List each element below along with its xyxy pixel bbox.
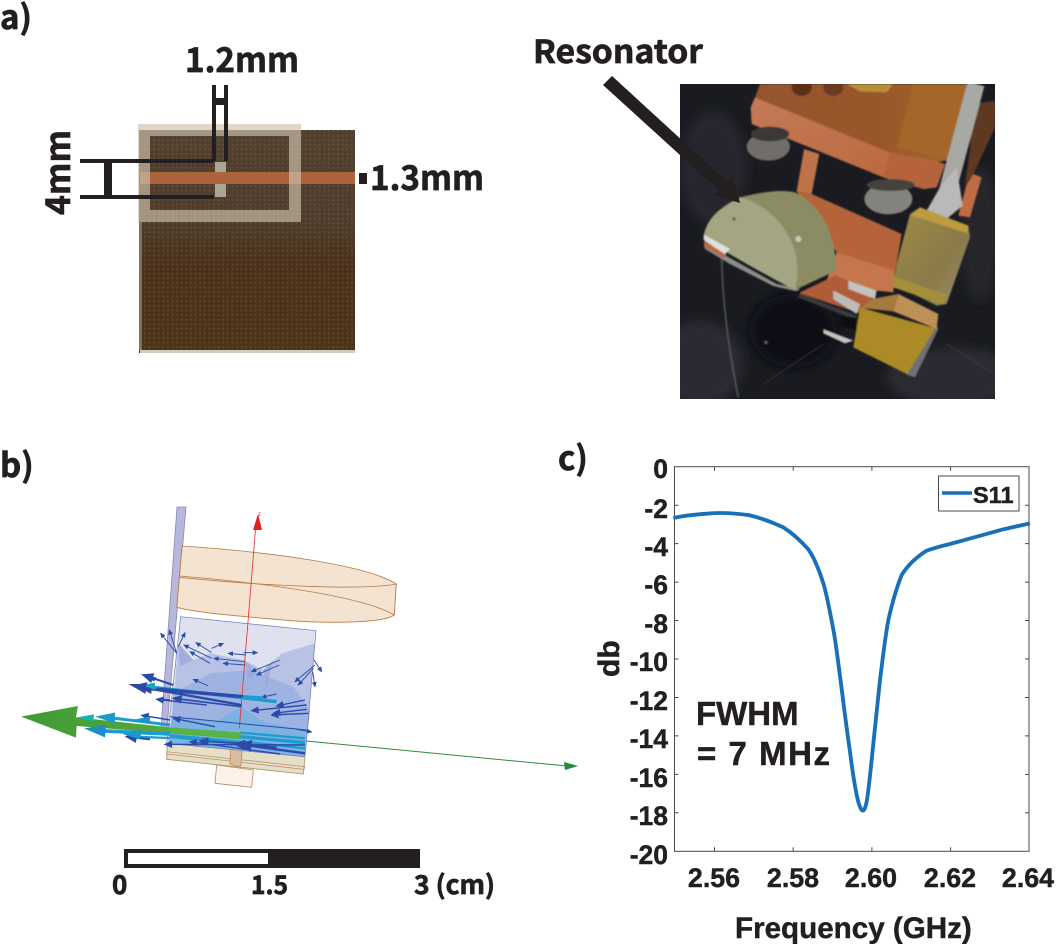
right copper arm xyxy=(958,174,982,217)
S11 curve xyxy=(673,513,1030,811)
x-axis tick labels xyxy=(688,863,1054,893)
ticks xyxy=(674,467,1029,851)
scale label 0: 0 xyxy=(112,865,127,902)
brass block xyxy=(853,307,938,376)
panel label: c): c) xyxy=(558,432,588,480)
silver solder under resonator xyxy=(705,244,800,291)
brass shoulder above block xyxy=(862,294,898,311)
chart: S11 reflection vs frequency xyxy=(593,454,1054,944)
y-axis tick labels: -2 xyxy=(644,494,668,524)
axis: z xyxy=(239,523,256,728)
copper microstrip line xyxy=(140,172,355,184)
arrow: pointing to resonator xyxy=(603,76,740,203)
dimension label: 1.2mm: 1.2mm xyxy=(185,33,299,82)
copper plate band xyxy=(751,97,945,189)
photo: fabricated resonator on copper mount xyxy=(680,84,995,399)
x-axis tick labels: 2.58 xyxy=(767,863,819,893)
brass collar xyxy=(893,294,938,329)
cavity field volume xyxy=(167,617,316,757)
feed stub xyxy=(215,765,253,787)
y-axis tick labels: -12 xyxy=(630,686,668,716)
silver coax rod xyxy=(947,84,976,194)
dimension label: 4mm: 4mm xyxy=(31,130,80,215)
strong cyan vectors xyxy=(105,687,305,748)
axis: x xyxy=(306,741,578,770)
annotation: FWHM = 7 MHz: = 7 MHz xyxy=(697,735,830,772)
base substrate xyxy=(167,743,305,774)
scale label 3 (cm): 3 (cm) xyxy=(414,865,495,902)
plot frame xyxy=(674,467,1029,851)
panel: circuit board with resonator slot dimensions xyxy=(31,33,484,353)
copper bracket xyxy=(797,149,819,194)
y-axis tick labels: -16 xyxy=(630,763,668,793)
y-axis title: db xyxy=(593,640,626,677)
y-axis tick labels: -6 xyxy=(644,570,668,600)
y-axis tick labels: -8 xyxy=(644,609,668,639)
y-axis tick labels: -20 xyxy=(630,840,668,870)
x-axis tick labels: 2.64 xyxy=(1002,863,1054,893)
legend: S11 xyxy=(973,482,1014,508)
cyan arrowheads xyxy=(77,674,157,739)
resonator body xyxy=(740,190,836,290)
medium blue vectors xyxy=(127,675,308,754)
dominant green field arrow xyxy=(21,706,242,739)
legend xyxy=(938,476,1019,511)
resonator outline overlay xyxy=(138,124,301,222)
x-axis tick labels: 2.60 xyxy=(845,863,897,893)
y-axis tick labels: -14 xyxy=(630,724,668,754)
panel label: b): b) xyxy=(0,439,34,487)
scale label 1.5: 1.5 xyxy=(251,865,288,902)
x-axis tick labels: 2.62 xyxy=(924,863,976,893)
resonator half disc xyxy=(177,546,396,622)
y-axis tick labels: -18 xyxy=(630,801,668,831)
annotation: FWHM = 7 MHz: FWHM xyxy=(696,695,799,732)
y-axis tick labels: -10 xyxy=(630,647,668,677)
annotation: FWHM = 7 MHz xyxy=(696,695,830,772)
screws xyxy=(747,133,790,161)
label: Resonator: Resonator xyxy=(533,27,703,73)
slot vias xyxy=(215,162,226,197)
solder tabs xyxy=(848,281,877,299)
y-axis tick labels xyxy=(630,454,668,870)
dimension lines xyxy=(80,85,367,199)
axis: z arrowhead xyxy=(253,512,262,530)
feed probe rod xyxy=(161,507,186,728)
axis: z arrowhead: z xyxy=(258,512,261,518)
circuit board xyxy=(139,130,355,353)
y-axis tick labels: -4 xyxy=(644,532,668,562)
green band through cavity xyxy=(170,727,242,738)
copper block xyxy=(755,84,967,162)
panel: field simulation xyxy=(21,507,578,787)
scale bar xyxy=(112,849,495,902)
small field vectors xyxy=(161,630,322,732)
y-axis tick labels: 0 xyxy=(653,454,668,484)
cavity, field and arrows xyxy=(21,523,322,787)
x-axis tick labels: 2.56 xyxy=(688,863,740,893)
brass connector xyxy=(893,207,970,306)
dimension label: 1.3mm: 1.3mm xyxy=(370,151,484,200)
